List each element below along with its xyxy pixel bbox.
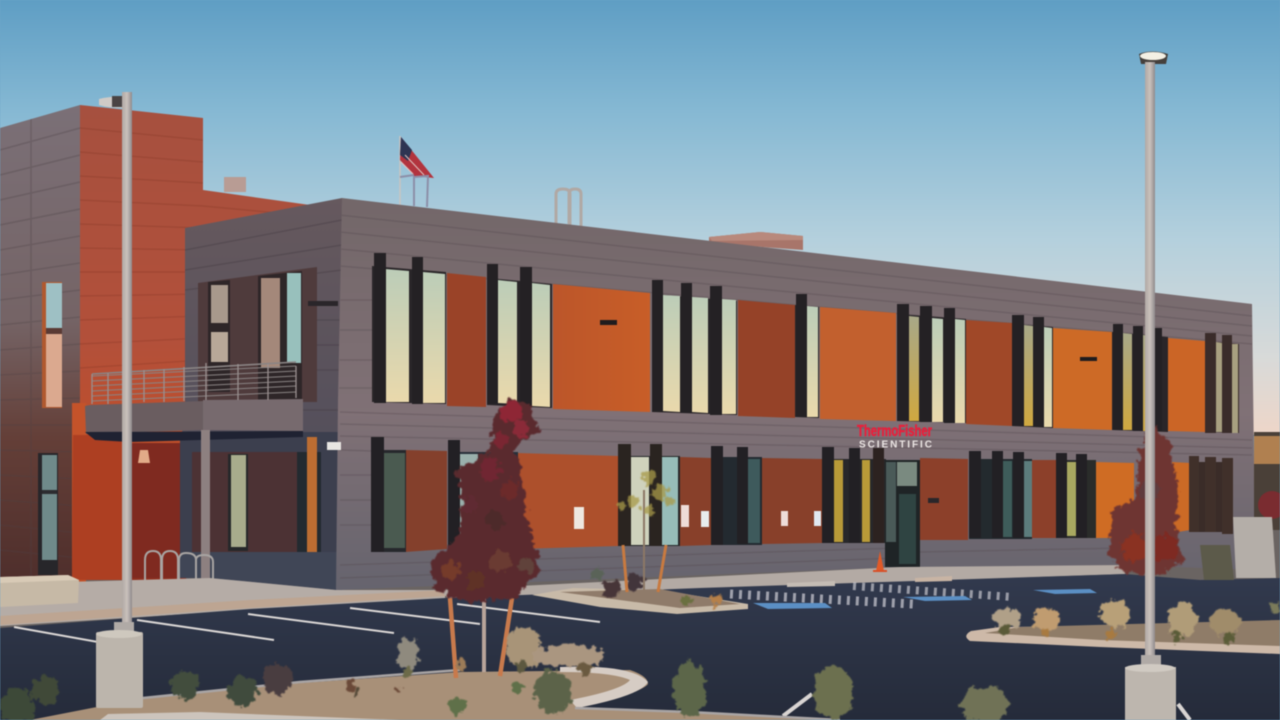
ground floor recessed entry [138, 432, 340, 590]
left tower: grey side [0, 105, 80, 580]
left wing grey facade [182, 198, 343, 433]
sky [0, 0, 1280, 435]
right light pole [1125, 52, 1176, 720]
foreground curb and mulch bed [30, 667, 840, 720]
company sign [857, 423, 932, 450]
left light pole [96, 92, 143, 708]
company sign: ThermoFisher [857, 423, 932, 440]
rooftop flag [400, 136, 434, 207]
lower storey windows [372, 450, 1233, 552]
upper storey windows [372, 266, 1239, 433]
parking lines [14, 604, 600, 642]
wall lights [308, 301, 1097, 503]
upper storey orange panels [447, 273, 1205, 432]
lower storey orange panels [405, 450, 1190, 552]
accessibility signs on wall [574, 505, 821, 529]
siding lines [338, 215, 1252, 578]
entrance door [885, 460, 920, 567]
sidewalk [0, 565, 1125, 626]
company sign: SCIENTIFIC [859, 440, 932, 450]
accessible stalls [730, 576, 1097, 609]
young yellow tree [619, 471, 674, 592]
red shrub tree near right [1108, 425, 1184, 575]
large red maple tree [432, 398, 540, 678]
small front island with shrubs [532, 568, 748, 614]
distant trees at right edge [1254, 432, 1280, 562]
bike racks [145, 551, 213, 581]
main facade [308, 198, 1254, 590]
traffic cone [873, 551, 887, 572]
rooftop unit [224, 177, 803, 250]
ground base [0, 530, 1280, 720]
concrete utility box [1200, 517, 1276, 580]
lower storey dark columns [371, 437, 1233, 552]
parking lot [0, 574, 1280, 720]
balcony [85, 362, 303, 594]
rooftop vent pipes [556, 189, 581, 226]
right landscaped island [966, 600, 1280, 654]
planter block [0, 575, 79, 607]
left tower: orange side [72, 105, 310, 583]
foreground grasses and shrubs [1, 627, 1009, 720]
upper storey dark columns [374, 253, 1232, 433]
